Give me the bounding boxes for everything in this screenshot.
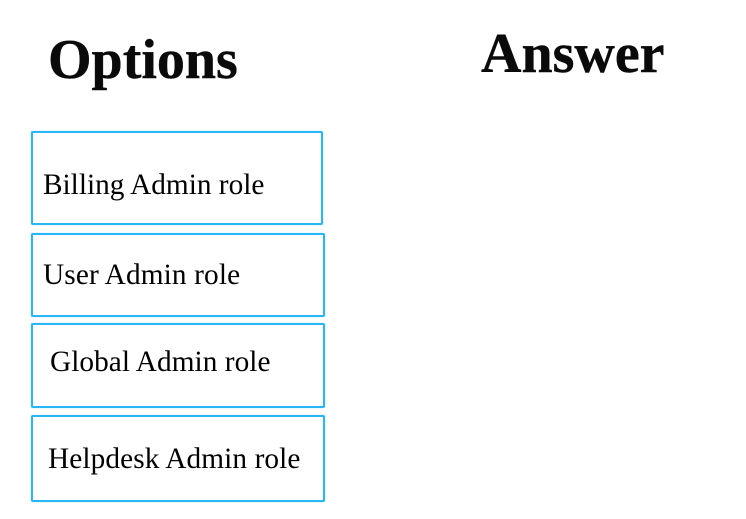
option label: Billing Admin role: Billing Admin role	[43, 169, 264, 201]
option label: Global Admin role: Global Admin role	[50, 346, 271, 378]
option box: Helpdesk Admin role	[31, 415, 325, 502]
heading: Options: Options	[48, 29, 238, 91]
option label: User Admin role: User Admin role	[43, 259, 240, 291]
option box: User Admin role	[31, 233, 325, 317]
option box: Billing Admin role	[31, 131, 323, 225]
option box: Global Admin role	[31, 323, 325, 408]
heading: Answer: Answer	[481, 23, 665, 85]
option label: Helpdesk Admin role: Helpdesk Admin role	[48, 443, 301, 475]
